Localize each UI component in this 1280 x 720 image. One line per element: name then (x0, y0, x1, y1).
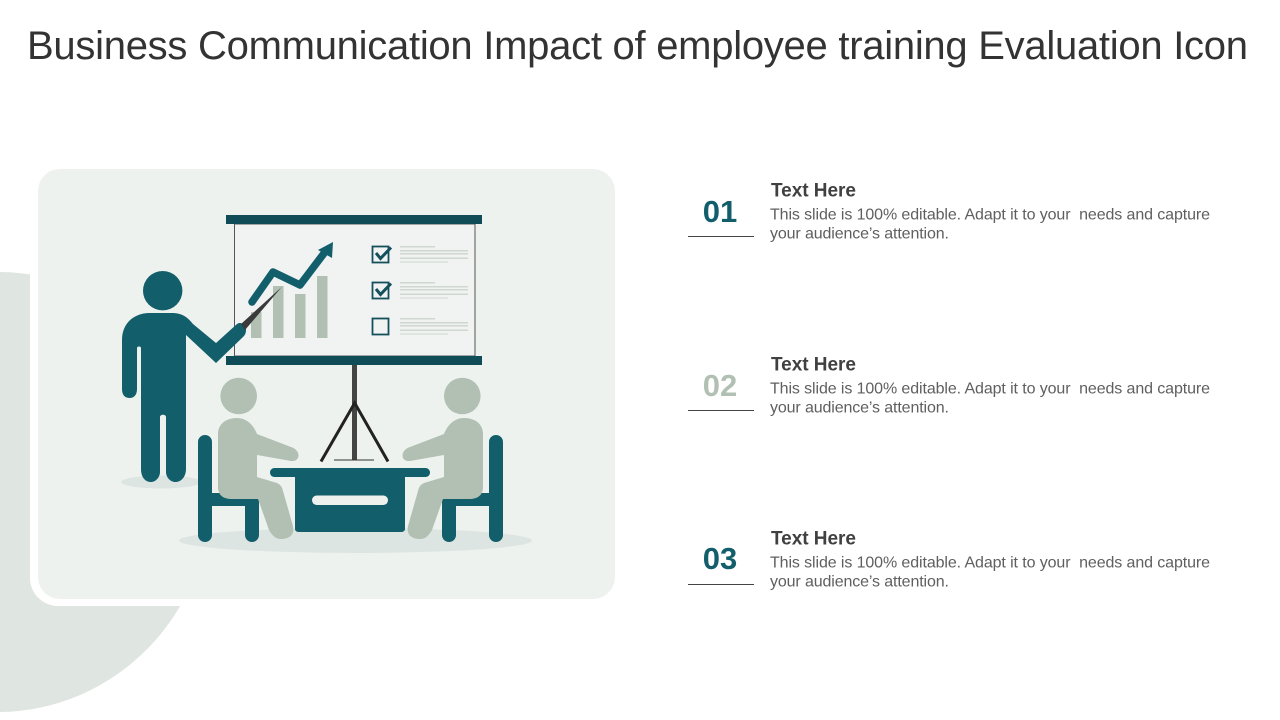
tripod stand (321, 365, 388, 462)
illustration: training session (121, 215, 532, 553)
body 01: This slide is 100% editable. Adapt it to your needs and capture (770, 206, 1210, 224)
decorative background circle (0, 272, 211, 712)
body 02: This slide is 100% editable. Adapt it to your needs and capture (770, 380, 1210, 398)
floor shadows (121, 476, 532, 553)
table (270, 468, 430, 532)
presenter figure (122, 271, 246, 482)
body 01 (770, 206, 1210, 242)
number 02: 02 (703, 368, 737, 403)
heading 01: Text Here (771, 180, 856, 202)
right chair (442, 435, 503, 542)
item 01 (688, 180, 1210, 242)
bar chart (251, 276, 328, 338)
item 03 (688, 528, 1210, 590)
body 03: your audience’s attention. (770, 574, 949, 590)
body 02 (770, 380, 1210, 416)
rising arrow (252, 242, 333, 302)
title: Business Communication Impact of employee training Evaluation Icon (27, 24, 1248, 68)
number 01: 01 (703, 194, 737, 229)
panel: illustration background (38, 169, 615, 599)
item 02 (688, 354, 1210, 416)
pointer stick (241, 287, 282, 330)
body 02: your audience’s attention. (770, 400, 949, 416)
right seated person (402, 378, 483, 539)
heading 03: Text Here (771, 528, 856, 550)
left chair (198, 435, 259, 542)
body 03 (770, 554, 1210, 590)
body 03: This slide is 100% editable. Adapt it to your needs and capture (770, 554, 1210, 572)
checklist (372, 246, 468, 334)
presentation board (226, 215, 482, 365)
left seated person (218, 378, 298, 539)
rule 01 (688, 236, 754, 237)
heading 02: Text Here (771, 354, 856, 376)
body 01: your audience’s attention. (770, 226, 949, 242)
number 03: 03 (703, 541, 737, 576)
rule 03 (688, 584, 754, 585)
rule 02 (688, 410, 754, 411)
white card border (30, 161, 623, 606)
